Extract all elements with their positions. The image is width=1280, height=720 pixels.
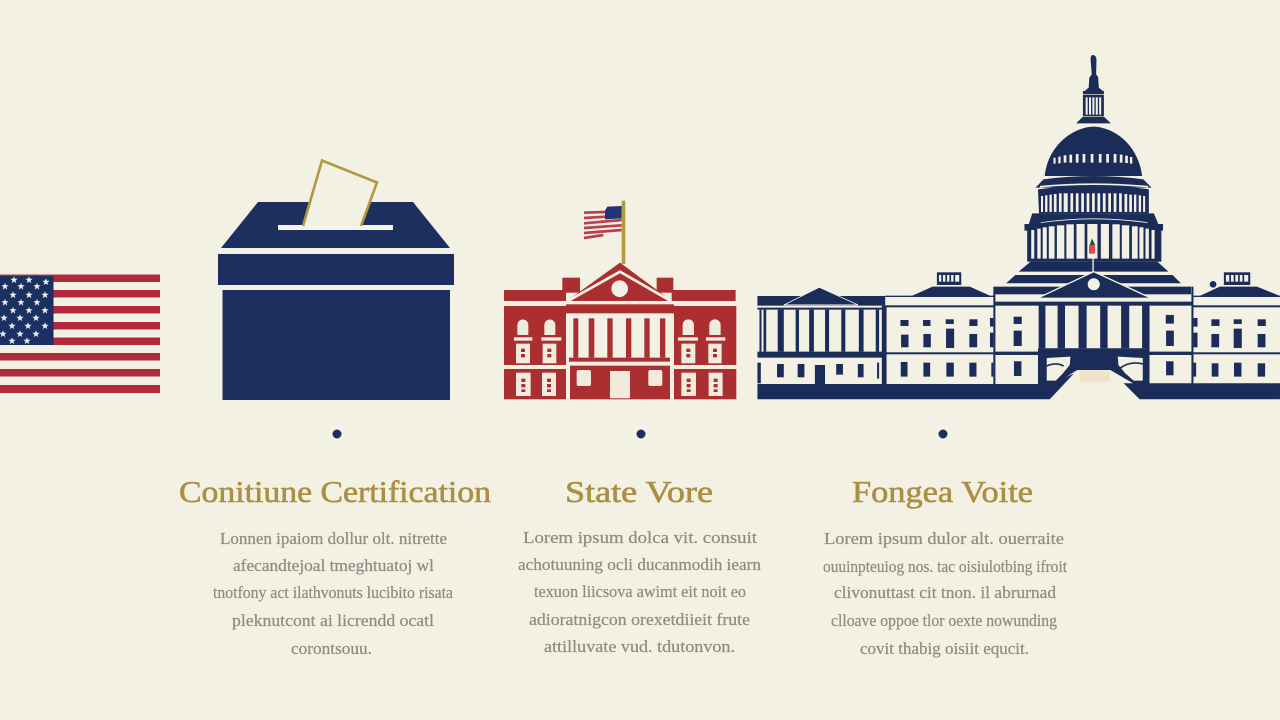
text block: column 2: adioratnigcon orexetdiieit frute <box>529 610 750 629</box>
text block: column 1: afecandtejoal tmeghtuatoj wl <box>233 556 434 575</box>
icon: US Capitol building <box>757 55 1280 400</box>
timeline dot 2 <box>636 430 646 438</box>
text block: column 3 <box>823 529 1067 658</box>
text block: column 3: clivonuttast cit tnon. il abrurnad <box>834 583 1056 602</box>
text block: column 2: attilluvate vud. tdutonvon. <box>544 637 735 656</box>
text block: column 3: clloave oppoe tlor oexte nowunding <box>831 611 1057 630</box>
icon: ballot box <box>218 160 454 400</box>
left wing <box>757 287 887 386</box>
red flag on the dome <box>1089 238 1095 273</box>
icon: red state house <box>504 201 736 399</box>
text block: column 2 <box>518 528 761 656</box>
heading: column 1: Conitiune Certification <box>179 474 492 509</box>
icon: American flag <box>0 274 160 393</box>
text block: column 1: corontsouu. <box>291 639 372 658</box>
left middle wing <box>885 272 995 385</box>
right wing <box>1191 272 1280 385</box>
central portico <box>995 272 1193 376</box>
timeline dot 1 <box>332 430 342 438</box>
timeline dot 3 <box>938 430 948 438</box>
text block: column 2: Lorem ipsum dolca vit. consuit <box>523 528 757 547</box>
text block: column 1: Lonnen ipaiom dollur olt. nitrette <box>220 529 447 548</box>
text block: column 3: covit thabig oisiit equcit. <box>860 639 1029 658</box>
text block: column 2: texuon liicsova awimt eit noit eo <box>534 582 746 601</box>
base and central staircase <box>757 348 1280 400</box>
text block: column 1 <box>213 529 453 658</box>
text block: column 3: Lorem ipsum dulor alt. ouerraite <box>824 529 1064 548</box>
heading: column 3: Fongea Voite <box>852 474 1033 509</box>
text block: column 1: pleknutcont ai licrendd ocatl <box>232 611 434 630</box>
text block: column 1: tnotfony act ilathvonuts lucibito risata <box>213 583 453 602</box>
capitol dome <box>995 55 1191 294</box>
heading: column 2: State Vore <box>565 474 713 509</box>
text block: column 3: ouuinpteuiog nos. tac oisiulotbing ifroit <box>823 557 1067 576</box>
text block: column 2: achotuuning ocli ducanmodih iearn <box>518 555 761 574</box>
